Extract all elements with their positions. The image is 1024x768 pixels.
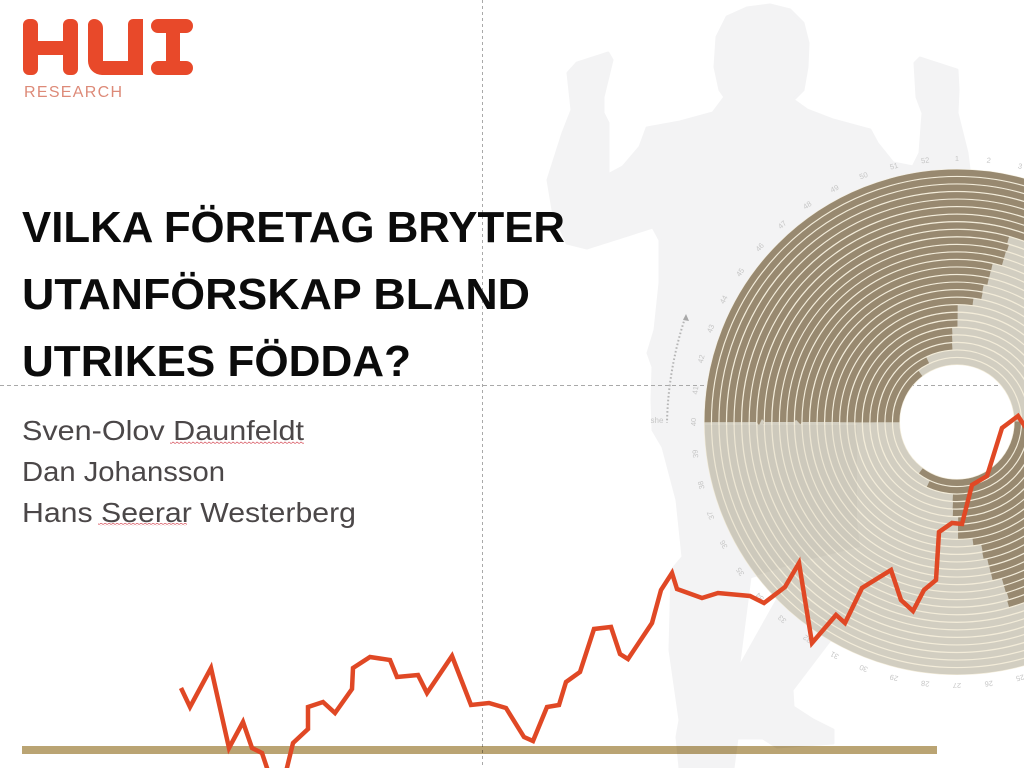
logo: HUI Research — [23, 19, 193, 101]
circular week labels: 37 — [705, 510, 716, 521]
dotted rotation arrow — [651, 314, 689, 425]
circular week labels: 48 — [801, 199, 813, 211]
circular week labels: 29 — [889, 672, 899, 683]
circular week labels: 33 — [776, 613, 788, 625]
horizontal dotted guide — [0, 384, 1024, 386]
circular week labels: 45 — [734, 266, 746, 278]
circular week labels: 35 — [734, 566, 746, 578]
circular week labels: 27 — [953, 681, 961, 690]
authors: Sven-Olov Daunfeldt — [22, 415, 304, 446]
circular week labels: 50 — [858, 170, 869, 181]
authors: Hans Seerar Westerberg — [22, 497, 356, 528]
circular week labels: 42 — [696, 354, 707, 364]
title: UTRIKES FÖDDA? — [22, 337, 411, 386]
circular week labels: 36 — [718, 539, 730, 550]
circular week labels: 26 — [984, 679, 993, 689]
concentric ring disc — [700, 173, 1024, 671]
circular week labels: 30 — [858, 663, 869, 674]
circular week labels: 49 — [829, 183, 840, 195]
circular week labels: 34 — [754, 591, 766, 603]
circular week labels: 47 — [776, 219, 788, 231]
dotted rotation arrow: she — [651, 416, 664, 425]
vertical dotted guide — [482, 0, 484, 768]
logo: HUI Research: RESEARCH — [24, 84, 122, 101]
title — [22, 203, 565, 386]
authors — [22, 415, 356, 528]
circular week labels — [689, 154, 1024, 690]
authors: Dan Johansson — [22, 456, 225, 487]
circular week labels: 39 — [690, 449, 700, 458]
circular week labels: 1 — [955, 154, 959, 163]
circular week labels: 44 — [718, 294, 730, 305]
title: UTANFÖRSKAP BLAND — [22, 270, 530, 319]
circular week labels: 3 — [1017, 161, 1023, 171]
gold baseline bar — [22, 746, 937, 754]
circular week labels: 38 — [696, 480, 707, 490]
title: VILKA FÖRETAG BRYTER — [22, 203, 565, 252]
silhouette: cheering man — [548, 5, 975, 768]
red growth line — [181, 416, 1024, 768]
circular week labels: 46 — [754, 241, 766, 253]
circular week labels: 43 — [705, 323, 716, 334]
circular week labels: 2 — [986, 156, 991, 165]
circular week labels: 28 — [921, 679, 930, 689]
circular week labels: 41 — [690, 386, 700, 395]
circular week labels: 32 — [801, 633, 813, 645]
circular week labels: 52 — [921, 155, 930, 165]
circular week labels: 31 — [829, 649, 840, 661]
circular week labels: 40 — [689, 418, 698, 426]
circular week labels: 51 — [889, 161, 899, 172]
